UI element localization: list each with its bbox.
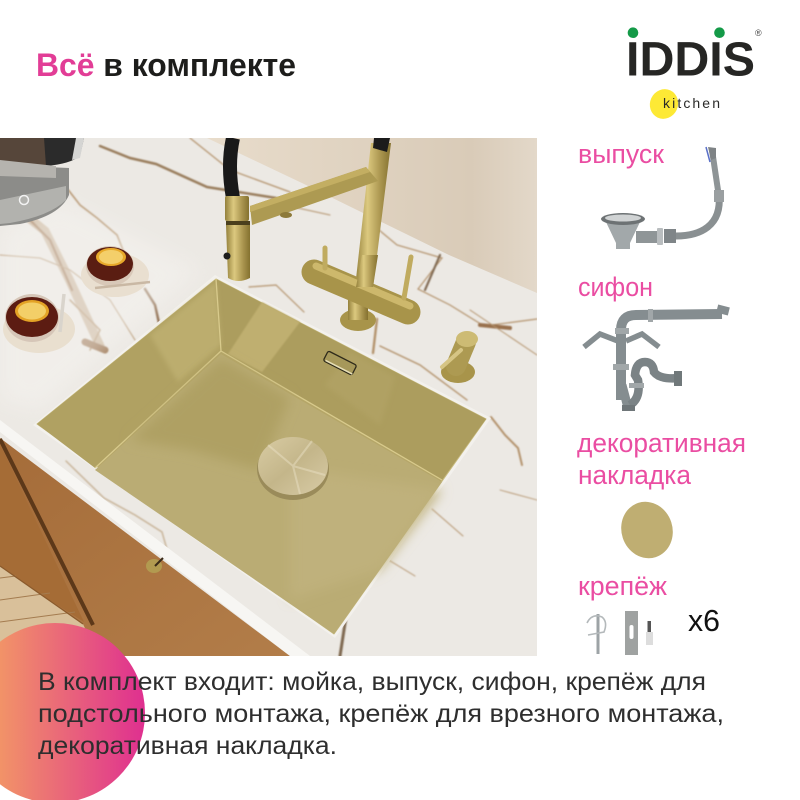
tea cup back <box>81 246 150 297</box>
label: x6: x6 <box>688 603 720 638</box>
back wall left <box>37 279 221 468</box>
label: крепёж: крепёж <box>578 571 667 601</box>
logo: IDDIS kitchen: kitchen <box>663 95 720 111</box>
gradient circle <box>0 623 145 800</box>
text block: contents list: подстольного монтажа, крепёж для врезного монтажа, <box>38 700 724 728</box>
label: декоративная накладка <box>577 428 746 490</box>
column over mixer <box>356 255 378 287</box>
panel: kitchen sink photo <box>0 138 537 656</box>
corner highlights <box>95 279 442 480</box>
door gap <box>0 439 93 625</box>
countertop highlight <box>0 196 159 354</box>
logo: IDDIS kitchen <box>626 27 762 124</box>
icon: fasteners <box>587 611 653 655</box>
black pull-out hose <box>230 138 233 198</box>
icon: decorative cover disc <box>614 495 680 565</box>
faucet base stem <box>340 309 376 331</box>
text block: contents list <box>38 668 724 760</box>
sink <box>33 275 491 638</box>
label: сифон: сифон <box>578 272 653 302</box>
sink white lip <box>33 275 491 638</box>
counter front edge <box>0 420 310 656</box>
soap dispenser <box>441 331 478 383</box>
wall behind counter <box>207 138 537 293</box>
label: декоративная накладка: накладка <box>578 460 692 490</box>
overflow <box>323 351 357 375</box>
faucet <box>224 138 411 331</box>
kettle <box>0 138 84 226</box>
marble veins <box>0 138 537 656</box>
icon: siphon <box>584 306 724 411</box>
floor <box>0 566 85 642</box>
label: декоративная накладка: декоративная <box>577 428 746 458</box>
logo: IDDIS kitchen: IDDIS <box>626 34 755 86</box>
cabinet front <box>0 438 290 656</box>
logo: IDDIS kitchen: ® <box>755 28 762 38</box>
mixer levers <box>325 248 411 298</box>
tea cup front <box>3 294 75 353</box>
title: Всё в комплекте <box>36 47 296 83</box>
spout arm <box>250 167 378 225</box>
black top hose <box>373 138 390 152</box>
left cabinet door <box>8 542 84 622</box>
label: выпуск: выпуск <box>578 139 664 169</box>
icon: drain outlet <box>601 147 724 249</box>
sink floor <box>95 354 442 634</box>
back wall right <box>216 279 486 480</box>
collar <box>225 196 249 221</box>
drain cover <box>257 437 329 500</box>
spray head <box>226 225 250 281</box>
text block: contents list: декоративная накладка. <box>38 732 337 760</box>
text block: contents list: В комплект входит: мойка, выпуск, сифон, крепёж для <box>38 668 706 696</box>
cabinet handle <box>146 558 163 573</box>
main column <box>355 143 391 288</box>
mixer body <box>314 272 408 312</box>
